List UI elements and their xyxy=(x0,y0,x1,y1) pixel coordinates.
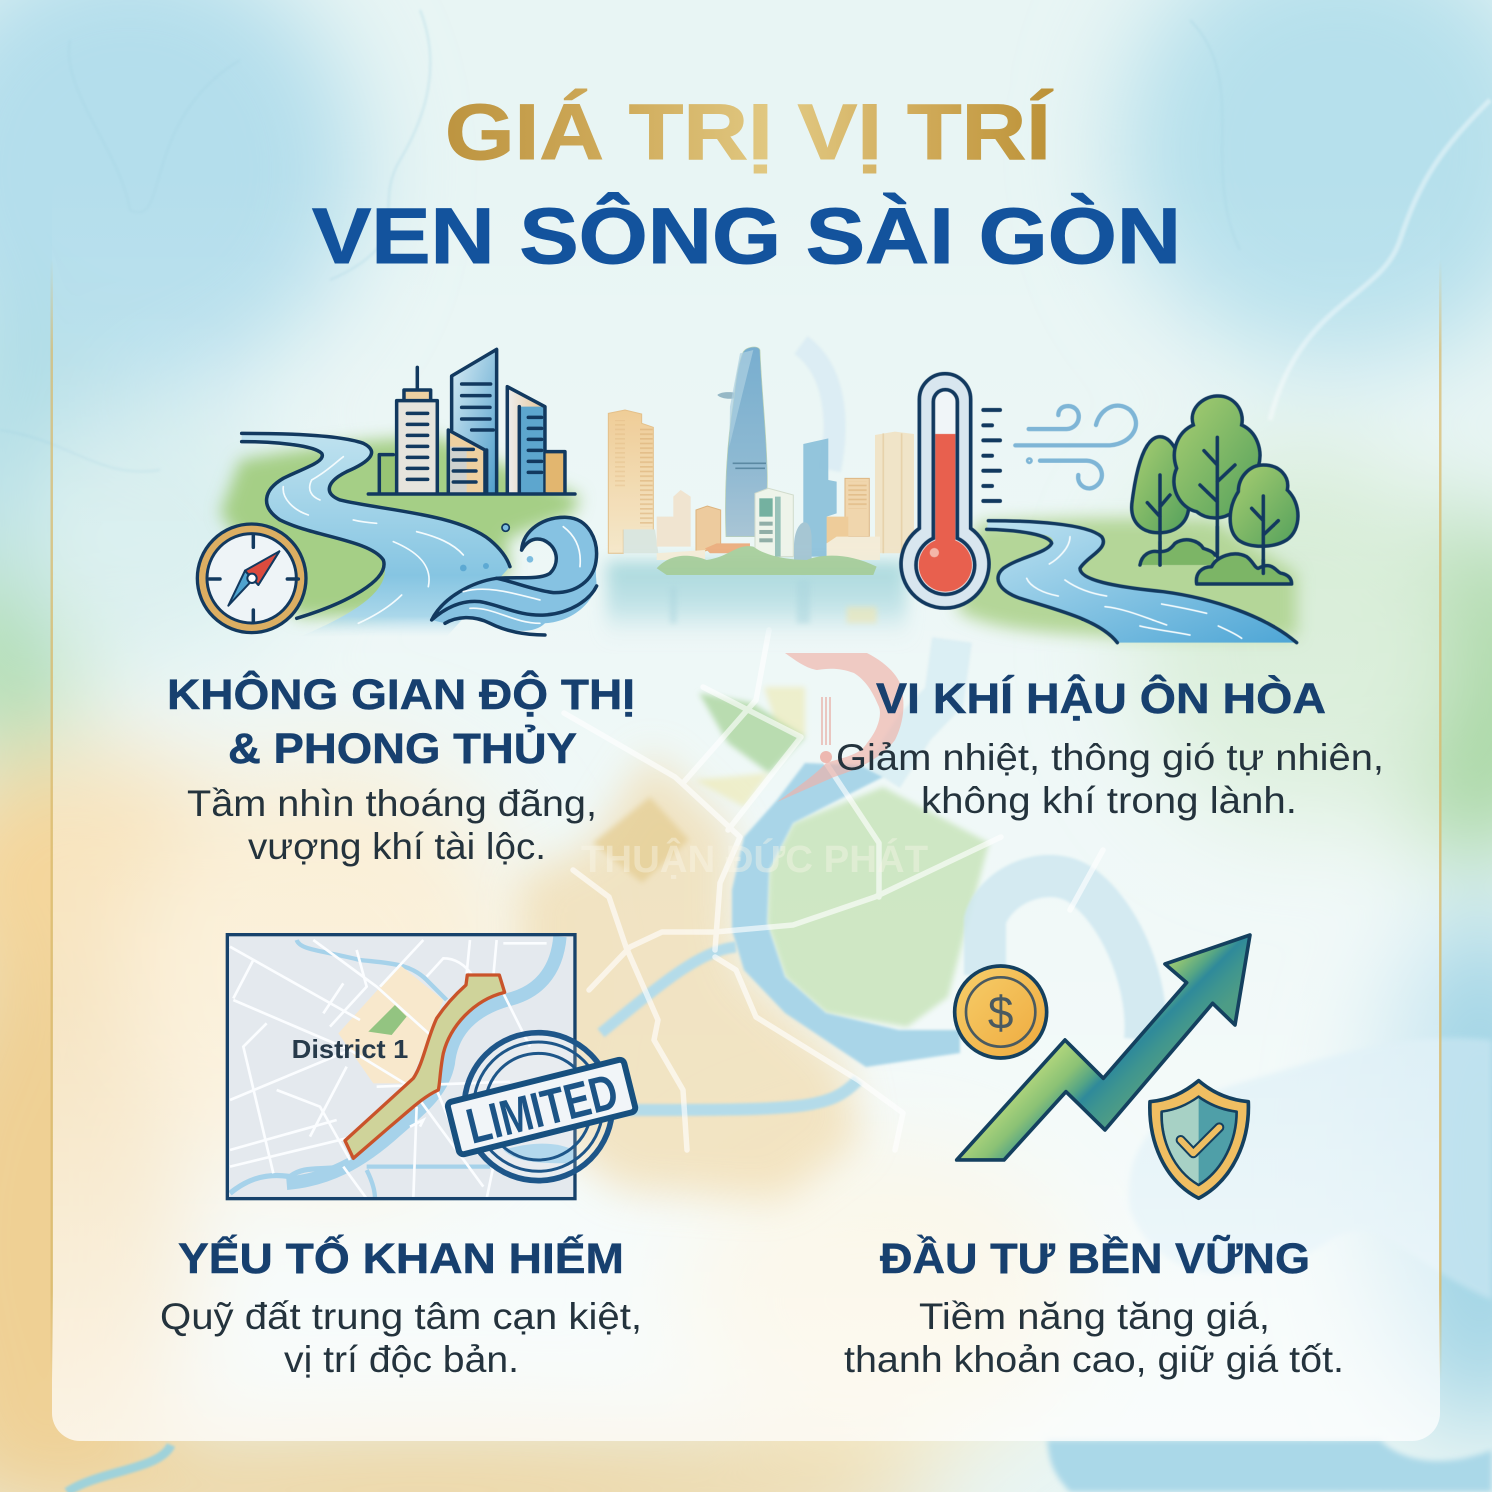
icon: river, city, compass and wave xyxy=(197,349,597,637)
shield xyxy=(1150,1081,1248,1198)
text: microclimate description: không khí trong lành. xyxy=(921,780,1297,821)
heading: urban space and feng shui xyxy=(167,670,635,773)
text: urban space description: vượng khí tài lộc. xyxy=(248,826,546,867)
heading: sustainable investment: ĐẦU TƯ BỀN VỮNG xyxy=(880,1234,1310,1283)
watermark logo: THUẬN ĐỨC PHÁT xyxy=(581,837,928,881)
wind xyxy=(1015,406,1136,488)
text: investment description: thanh khoản cao, giữ giá tốt. xyxy=(844,1339,1344,1380)
icon: thermometer, wind, river and trees xyxy=(901,374,1298,643)
river xyxy=(987,521,1297,643)
text: scarcity description: Quỹ đất trung tâm cạn kiệt, xyxy=(160,1296,642,1337)
label: District 1: District 1 xyxy=(292,1034,408,1064)
bottom right river patch xyxy=(1047,1440,1492,1492)
title line 1: GIÁ TRỊ VỊ TRÍ xyxy=(445,87,1053,176)
central skyline illustration xyxy=(607,347,914,640)
title line 2: VEN SÔNG SÀI GÒN xyxy=(312,191,1181,280)
text: microclimate description: Giảm nhiệt, thông gió tự nhiên, xyxy=(836,737,1384,778)
text: investment description: Tiềm năng tăng giá, xyxy=(919,1296,1270,1337)
text: scarcity description xyxy=(160,1296,642,1380)
map base xyxy=(227,935,575,1199)
compass xyxy=(197,524,306,633)
text: investment description xyxy=(844,1296,1344,1380)
green land xyxy=(957,518,1297,637)
limited stamp: LIMITED xyxy=(461,1063,623,1155)
limited stamp xyxy=(447,1033,637,1181)
trees xyxy=(1132,396,1298,584)
title xyxy=(312,87,1181,280)
text: scarcity description: vị trí độc bản. xyxy=(284,1339,519,1380)
faint map layer xyxy=(520,345,1146,1200)
river xyxy=(242,433,510,637)
thermometer xyxy=(901,374,1000,608)
icon: district 1 map with limited stamp xyxy=(227,935,637,1199)
content panel xyxy=(50,170,1442,1441)
icon: growth arrow, coin and shield xyxy=(955,935,1250,1198)
wave xyxy=(432,517,597,635)
coin: $ xyxy=(988,987,1013,1039)
coin xyxy=(955,966,1047,1058)
watermark logo xyxy=(581,653,928,881)
heading: mild microclimate: VI KHÍ HẬU ÔN HÒA xyxy=(876,674,1326,723)
text: urban space description: Tầm nhìn thoáng đãng, xyxy=(187,783,597,824)
riverside strip xyxy=(345,975,505,1158)
green land xyxy=(220,437,580,617)
text: urban space description xyxy=(187,783,597,867)
heading: scarcity factor: YẾU TỐ KHAN HIẾM xyxy=(178,1234,624,1283)
text: microclimate description xyxy=(836,737,1384,821)
buildings xyxy=(368,349,575,494)
heading: urban space and feng shui: & PHONG THỦY xyxy=(228,724,577,773)
growth arrow xyxy=(957,935,1250,1160)
heading: urban space and feng shui: KHÔNG GIAN ĐỘ THỊ xyxy=(167,670,635,719)
